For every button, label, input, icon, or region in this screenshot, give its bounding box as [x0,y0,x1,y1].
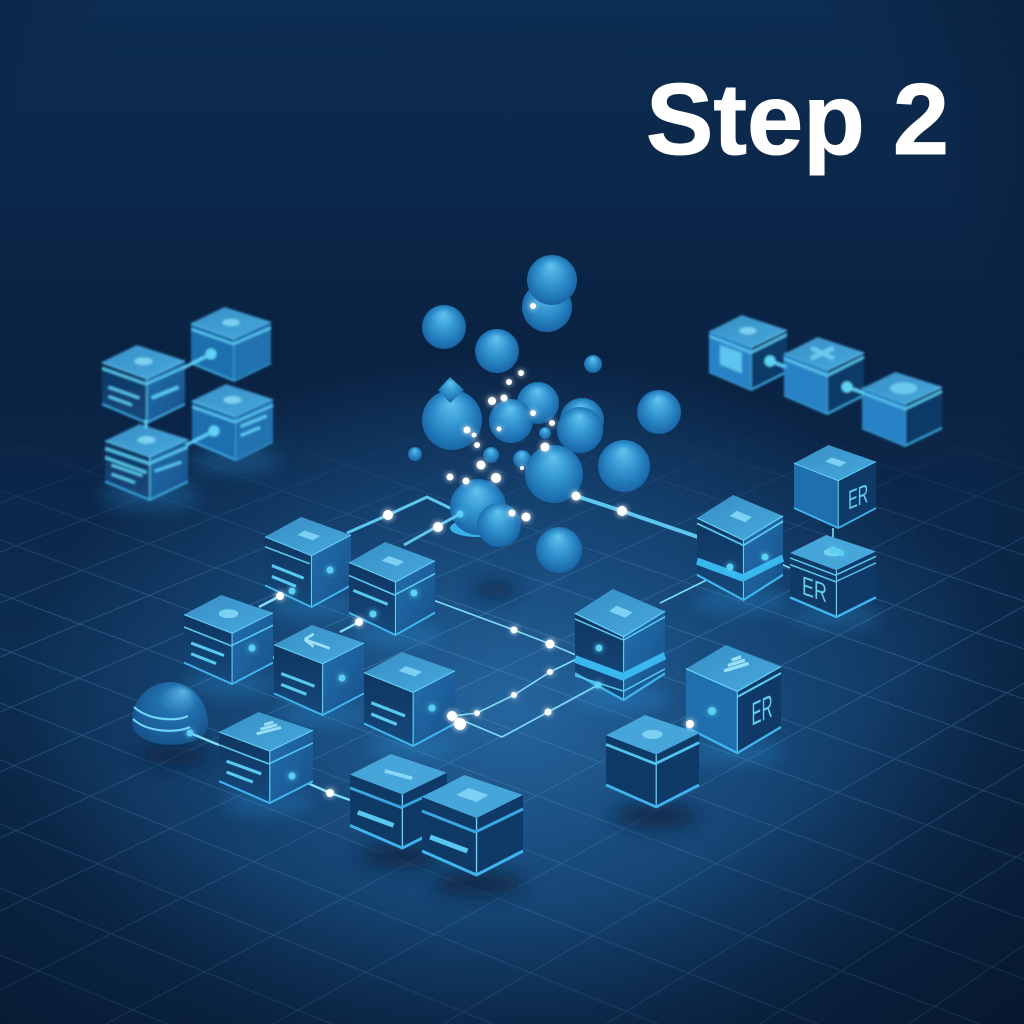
connection dots: cyan [186,510,844,780]
cube: upper-right third [862,372,942,446]
label: ER on front cube: ER [752,688,773,734]
cube: M front right [606,715,699,807]
sphere cloud [408,255,681,503]
cube: I lower ER [790,535,876,617]
cube: upper-left bottom [105,424,188,500]
cube: R [364,652,455,746]
connectors: upper-right [766,357,864,393]
cube: U [422,775,523,875]
cube: S [219,712,313,803]
cube: upper-left lower right [192,384,273,460]
cube: T [350,754,447,848]
cube: Q with arrow icon [274,625,364,715]
connector lines [190,496,833,800]
cube: O [349,542,435,635]
cube: K centre stacked [575,589,665,700]
floor glow under objects [100,448,880,813]
cube: upper-left middle [102,345,185,423]
floor grid [0,451,1024,1024]
connectors: upper-left [146,350,218,445]
cube: upper-left top [191,307,271,381]
label: ER on lower cube: ER [802,570,827,608]
label: ER on raised cube: ER [848,477,868,516]
cube: J stacked right [697,495,783,600]
cube: H raised ER [794,445,876,528]
cube: P [184,595,273,684]
sphere base with connectors: left group [347,479,521,547]
cube: L ER front [686,645,781,753]
cluster: upper-right data blocks [709,315,942,446]
title: Step 2 [646,64,949,176]
floor shadows [139,582,697,896]
sphere: lower centre [536,527,582,573]
cluster: upper-left data blocks [102,307,273,500]
cube: upper-right second [784,337,864,414]
cube: upper-right first [709,315,787,390]
sphere: striped left node [132,682,208,745]
cube: N [265,517,351,607]
connection dots: white sparks [276,303,694,797]
